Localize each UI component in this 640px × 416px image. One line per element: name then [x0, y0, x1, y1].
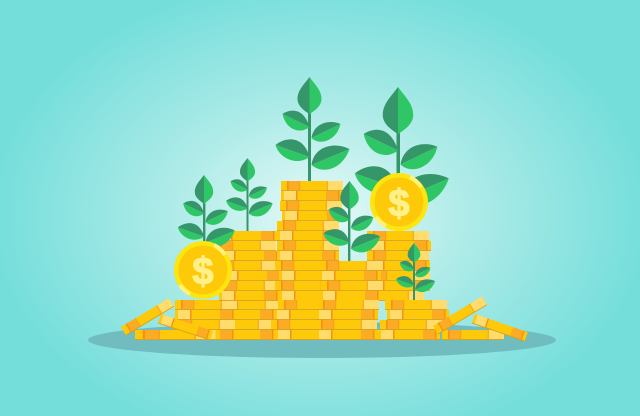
coin: right dollar [370, 173, 428, 231]
plant: left [178, 175, 235, 250]
coin: left dollar: $ [192, 251, 214, 293]
plant: small left [226, 158, 273, 232]
plant: small right [396, 243, 435, 300]
plant: centre right [323, 181, 380, 261]
coin stack: upper right column [362, 231, 431, 301]
coin stack: middle right column [319, 261, 383, 301]
plant: tall centre [276, 77, 350, 182]
coin stack: left base and column [173, 231, 284, 340]
coin stack: centre column [271, 181, 344, 340]
ground shadow [88, 322, 556, 358]
plant: tall right [355, 87, 449, 205]
fallen coins: right [433, 297, 528, 342]
coin: right dollar: $ [388, 183, 410, 225]
coin: left dollar [174, 241, 232, 299]
fallen coins: left [121, 298, 216, 340]
coin stack: right base [315, 300, 449, 340]
